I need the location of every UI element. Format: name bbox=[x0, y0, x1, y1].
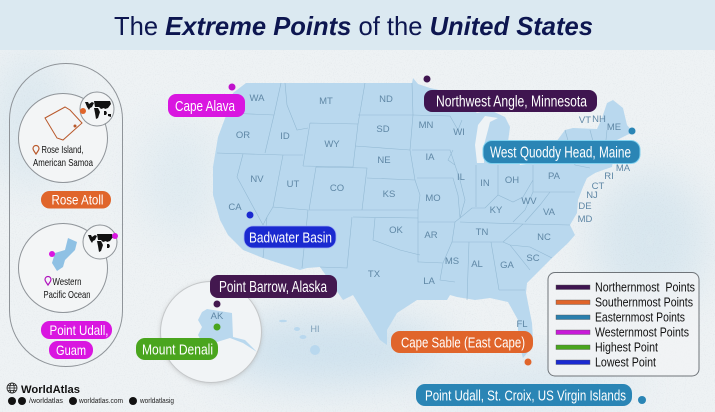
state abbreviations: OH bbox=[505, 175, 519, 186]
legend: Northernmost Points bbox=[595, 280, 695, 294]
rose island caption: Rose Island, bbox=[42, 144, 84, 156]
state abbreviations: RI bbox=[604, 171, 614, 182]
western pacific caption: Pacific Ocean bbox=[44, 289, 91, 301]
callout: point udall virgin islands: Point Udall, St. Croix, US Virgin Islands bbox=[425, 388, 626, 404]
rose atoll label: Rose Atoll bbox=[52, 192, 104, 208]
state abbreviations: WI bbox=[453, 127, 465, 138]
state abbreviations: IA bbox=[426, 152, 435, 163]
state abbreviations: SC bbox=[526, 253, 540, 264]
callout: point barrow bbox=[210, 275, 337, 308]
title: The Extreme Points of the United States bbox=[114, 11, 593, 41]
state abbreviations: DE bbox=[578, 201, 592, 212]
point udall guam label: Point Udall, bbox=[50, 322, 108, 338]
rose island caption: American Samoa bbox=[33, 157, 93, 169]
state abbreviations: CT bbox=[592, 181, 605, 192]
state abbreviations: VT bbox=[579, 115, 591, 126]
state abbreviations: SD bbox=[376, 124, 390, 135]
callout: cape sable bbox=[391, 331, 533, 366]
state abbreviations: CO bbox=[330, 183, 344, 194]
state abbreviations: WA bbox=[250, 93, 265, 104]
state abbreviations: MD bbox=[578, 214, 593, 225]
callout: point barrow: Point Barrow, Alaska bbox=[219, 279, 327, 296]
icon: location pin bbox=[33, 146, 39, 154]
state abbreviations: NV bbox=[250, 174, 264, 185]
legend: Easternmost Points bbox=[595, 310, 685, 324]
state abbreviations bbox=[228, 93, 631, 330]
callout: cape alava bbox=[168, 84, 245, 117]
state abbreviations: MO bbox=[425, 193, 441, 204]
state abbreviations: MS bbox=[445, 256, 459, 267]
callout: mount denali bbox=[136, 324, 220, 360]
callout: west quoddy head: West Quoddy Head, Maine bbox=[490, 144, 631, 162]
state abbreviations: VA bbox=[543, 207, 556, 218]
state abbreviations: MA bbox=[616, 163, 631, 174]
callout: west quoddy head bbox=[483, 128, 640, 164]
state abbreviations: ID bbox=[280, 131, 290, 142]
icon: world locator for guam bbox=[83, 225, 118, 259]
state abbreviations: IL bbox=[457, 172, 465, 183]
state abbreviations: NH bbox=[592, 114, 606, 125]
icon: globe bbox=[7, 383, 17, 393]
state abbreviations: ND bbox=[379, 94, 393, 105]
alaska abbreviation: AK bbox=[211, 311, 224, 322]
state abbreviations: PA bbox=[548, 171, 561, 182]
state abbreviations: KS bbox=[383, 189, 395, 200]
panel: rose atoll circle bbox=[18, 94, 108, 182]
callout: mount denali: Mount Denali bbox=[142, 342, 213, 358]
state abbreviations: WY bbox=[324, 139, 340, 150]
state abbreviations: KY bbox=[490, 205, 503, 216]
state abbreviations: AL bbox=[471, 259, 483, 270]
state abbreviations: WV bbox=[521, 196, 537, 207]
legend bbox=[548, 272, 699, 376]
callout: badwater basin: Badwater Basin bbox=[249, 230, 332, 246]
lake michigan bbox=[475, 116, 498, 163]
hawaii: HI bbox=[310, 324, 320, 334]
state abbreviations: ME bbox=[607, 122, 621, 133]
state abbreviations: GA bbox=[500, 260, 515, 271]
state abbreviations: CA bbox=[228, 202, 242, 213]
state abbreviations: TN bbox=[476, 227, 488, 238]
rose atoll outline bbox=[45, 107, 82, 140]
callout: cape alava: Cape Alava bbox=[175, 98, 236, 115]
worldatlas branding bbox=[7, 383, 174, 405]
legend: Highest Point bbox=[595, 340, 658, 354]
point udall guam label bbox=[41, 321, 112, 359]
alaska shape bbox=[198, 309, 257, 352]
state abbreviations: OR bbox=[236, 130, 250, 141]
icon: world locator for rose atoll bbox=[80, 92, 114, 126]
state abbreviations: MT bbox=[319, 96, 333, 107]
western pacific caption: Western bbox=[52, 276, 82, 288]
legend: Southernmost Points bbox=[595, 294, 693, 310]
point udall guam label: Guam bbox=[56, 342, 86, 358]
callout: northwest angle: Northwest Angle, Minnesota bbox=[436, 94, 587, 110]
legend: Lowest Point bbox=[595, 354, 656, 370]
state abbreviations: NC bbox=[537, 232, 551, 243]
state abbreviations: LA bbox=[423, 276, 435, 287]
worldatlas branding: WorldAtlas bbox=[21, 384, 80, 396]
state boundaries bbox=[217, 83, 607, 300]
state abbreviations: NJ bbox=[586, 190, 598, 201]
icon: location pin bbox=[45, 276, 51, 285]
callout: cape sable: Cape Sable (East Cape) bbox=[401, 334, 525, 352]
state abbreviations: NE bbox=[377, 155, 391, 166]
state abbreviations: IN bbox=[480, 178, 490, 189]
callout: point udall virgin islands bbox=[416, 384, 646, 406]
map: contiguous United States bbox=[213, 78, 633, 358]
title band bbox=[0, 0, 715, 50]
state abbreviations: OK bbox=[389, 225, 404, 236]
state abbreviations: UT bbox=[287, 179, 300, 190]
guam shape bbox=[52, 238, 77, 271]
panel: outlying points capsule bbox=[10, 64, 122, 366]
state abbreviations: AR bbox=[424, 230, 438, 241]
callout: northwest angle bbox=[424, 76, 597, 112]
hawaii bbox=[279, 320, 320, 355]
callout: badwater basin bbox=[244, 212, 336, 248]
social icons bbox=[8, 397, 137, 405]
panel: alaska inset bbox=[160, 282, 262, 384]
panel: guam circle bbox=[18, 224, 108, 312]
legend: Westernmost Points bbox=[595, 324, 689, 340]
state abbreviations: MN bbox=[419, 120, 434, 131]
state abbreviations: TX bbox=[368, 269, 381, 280]
worldatlas branding: /worldatlas bbox=[29, 398, 63, 405]
worldatlas branding: worldatlas.com bbox=[78, 398, 123, 405]
worldatlas branding: worldatlasig bbox=[139, 398, 174, 405]
state abbreviations: FL bbox=[516, 319, 528, 330]
